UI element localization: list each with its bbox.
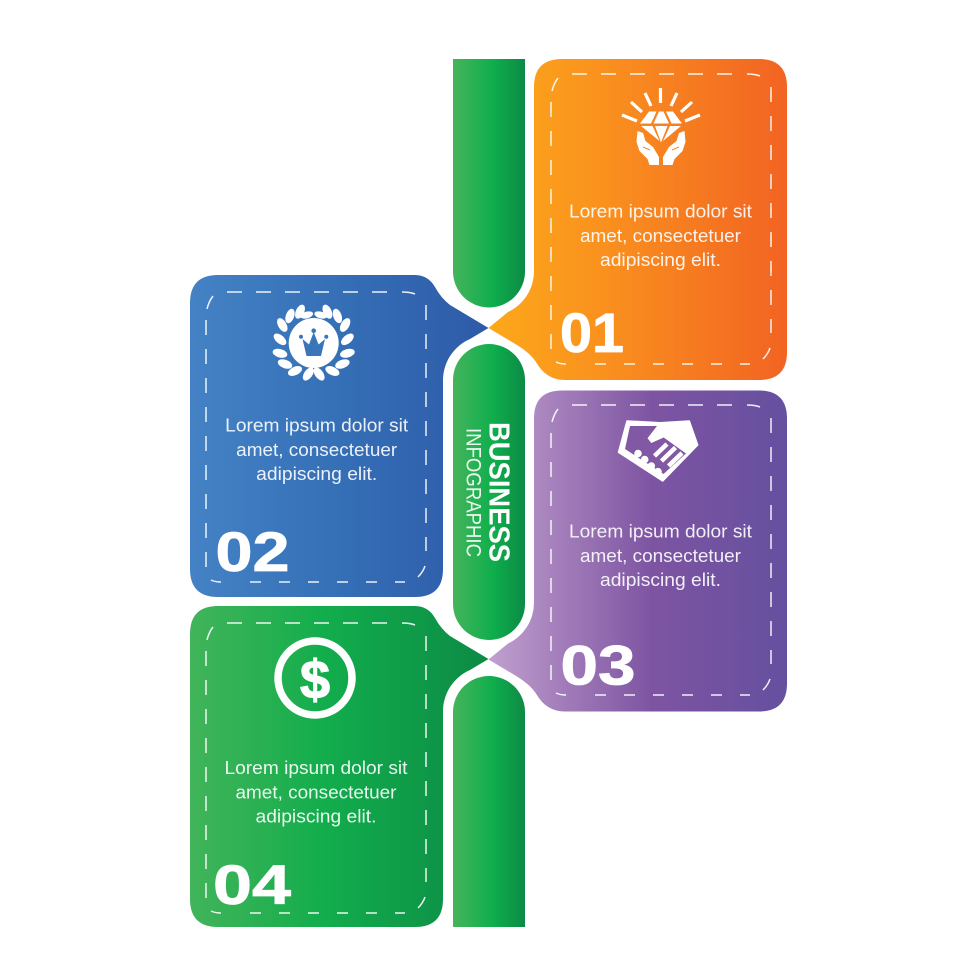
panel 02: blue: [190, 275, 488, 597]
body text: amet, consectetuer: [580, 545, 741, 566]
number 01: 01: [560, 301, 624, 364]
body text: [224, 757, 408, 826]
panel 04: green: [190, 606, 488, 927]
body text: [225, 415, 408, 484]
body text: adipiscing elit.: [256, 463, 377, 484]
body text: Lorem ipsum dolor sit: [224, 757, 408, 778]
body text: adipiscing elit.: [600, 569, 721, 590]
dashed border: [206, 292, 426, 582]
pillar title: [462, 422, 514, 562]
number 04: 04: [213, 853, 291, 916]
icon: dollar coin: [278, 641, 352, 715]
body text: amet, consectetuer: [580, 225, 741, 246]
body text: [569, 200, 752, 270]
subheading: infographic: INFOGRAPHIC: [462, 428, 484, 557]
icon: laurel and crown: [272, 303, 356, 383]
top green pillar: [453, 59, 525, 307]
body text: Lorem ipsum dolor sit: [225, 415, 408, 436]
body text: amet, consectetuer: [236, 782, 396, 802]
body text: Lorem ipsum dolor sit: [569, 200, 752, 222]
dashed border: [551, 74, 771, 364]
orange callout shape: [488, 59, 787, 380]
number 02: 02: [216, 520, 290, 583]
dashed border: [551, 405, 771, 695]
panel 01: orange: [488, 59, 787, 380]
dashed border: [206, 623, 426, 913]
body text: [569, 521, 752, 590]
body text: adipiscing elit.: [600, 249, 721, 270]
icon: diamond in hands: [622, 88, 700, 165]
body text: adipiscing elit.: [256, 806, 376, 826]
body text: amet, consectetuer: [236, 439, 397, 460]
bottom green pillar: [453, 676, 525, 927]
heading: business: BUSINESS: [482, 422, 514, 562]
body text: Lorem ipsum dolor sit: [569, 521, 752, 542]
icon: handshake: [618, 421, 698, 481]
number 03: 03: [560, 634, 636, 696]
icon: dollar coin: $: [300, 650, 330, 710]
blue callout shape: [190, 275, 488, 597]
middle green pillar: [453, 344, 525, 640]
purple callout shape: [488, 390, 787, 712]
panel 03: purple: [488, 390, 787, 712]
green callout shape: [190, 606, 488, 927]
